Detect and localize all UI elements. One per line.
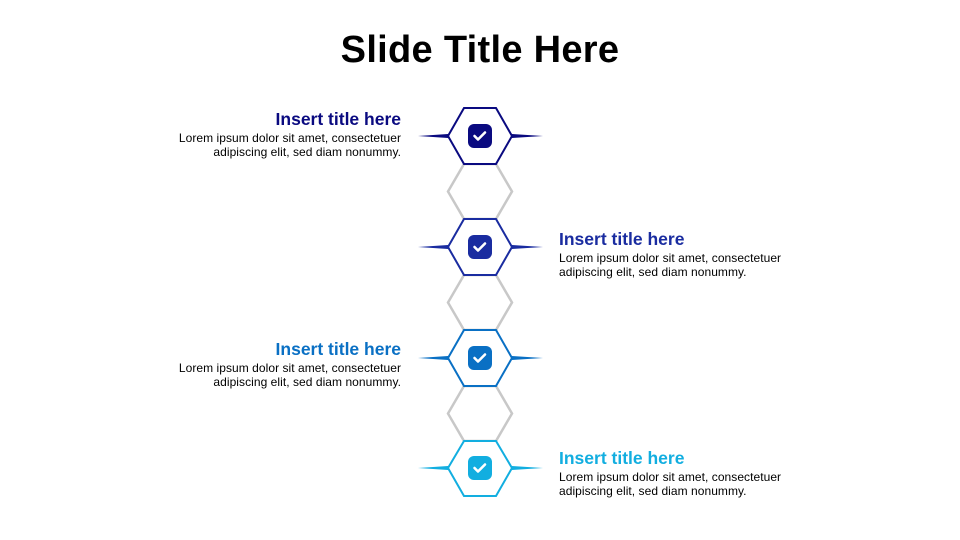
text block 2: Lorem ipsum dolor sit amet, consectetuer	[559, 251, 781, 265]
node 2	[418, 219, 543, 275]
gray connector hexagons	[448, 164, 512, 441]
text block 1: adipiscing elit, sed diam nonummy.	[213, 145, 401, 159]
node 4	[418, 441, 543, 496]
title: Slide Title Here	[341, 29, 619, 71]
text block 4	[559, 448, 781, 498]
text block 4: Lorem ipsum dolor sit amet, consectetuer	[559, 470, 781, 484]
text block 3: adipiscing elit, sed diam nonummy.	[213, 375, 401, 389]
node 3	[418, 330, 543, 386]
text block 2: Insert title here	[559, 229, 684, 249]
text block 1: Lorem ipsum dolor sit amet, consectetuer	[179, 131, 401, 145]
text block 1	[179, 109, 401, 159]
text block 4: adipiscing elit, sed diam nonummy.	[559, 484, 747, 498]
text block 3: Insert title here	[276, 339, 401, 359]
node 1	[418, 108, 543, 164]
text block 3: Lorem ipsum dolor sit amet, consectetuer	[179, 361, 401, 375]
text block 1: Insert title here	[276, 109, 401, 129]
text block 3	[179, 339, 401, 389]
text block 4: Insert title here	[559, 448, 684, 468]
text block 2	[559, 229, 781, 279]
text block 2: adipiscing elit, sed diam nonummy.	[559, 265, 747, 279]
